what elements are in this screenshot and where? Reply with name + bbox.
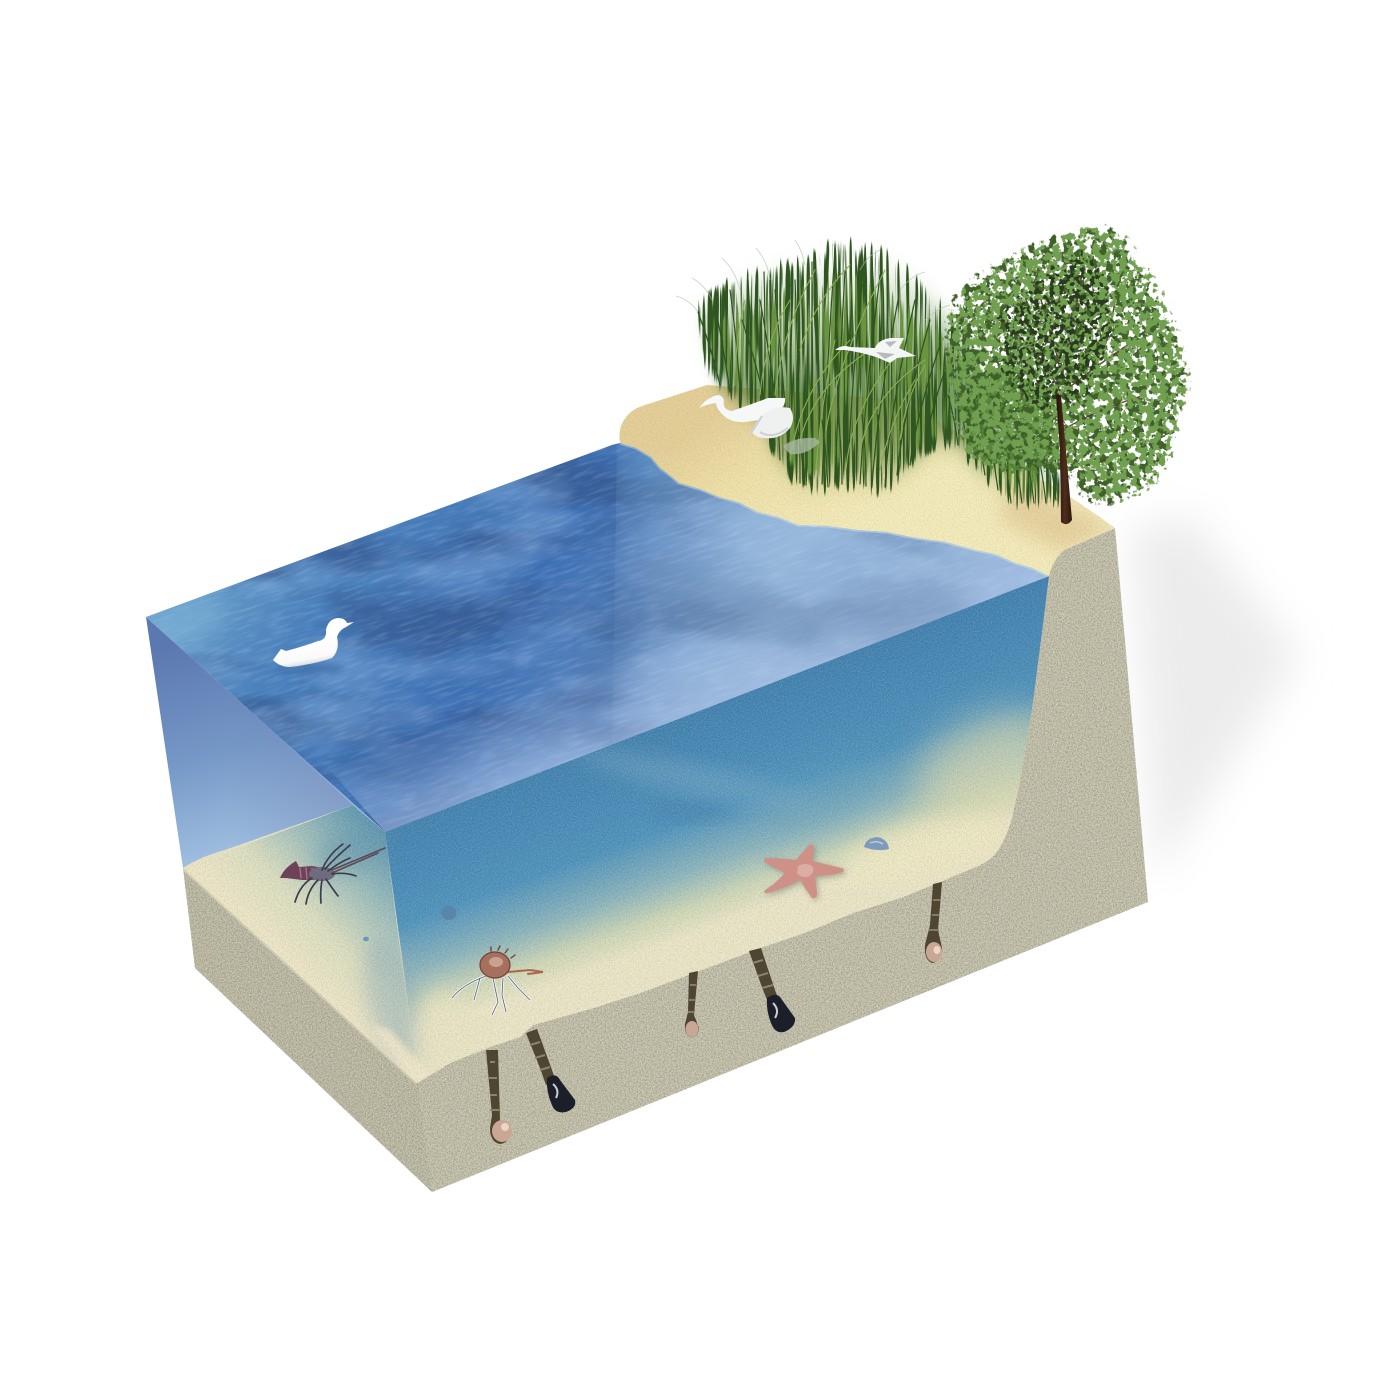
seabed: left underwater panel	[225, 805, 408, 1008]
icon: swans on the beach	[699, 395, 820, 454]
icon: burrowing mussel E	[925, 882, 942, 963]
tree	[936, 216, 1198, 524]
cast shadow of the block	[1130, 515, 1300, 880]
grass clump	[676, 228, 1070, 518]
icon: blue pebbles	[363, 837, 889, 941]
tree: branches	[985, 255, 1145, 464]
tree: foliage lower-left dense layer	[952, 350, 1060, 475]
icon: burrowing mussel D	[749, 948, 795, 1032]
beach top surface	[612, 385, 1115, 576]
water left face	[146, 617, 385, 868]
icon: flying bird	[835, 338, 916, 363]
tree: foliage shadow layer	[985, 235, 1125, 425]
icon: lobster	[280, 844, 385, 904]
seabed: sand and shadow drifts	[306, 689, 1072, 1083]
seabed and underwater front face	[170, 560, 1072, 1100]
illustration: coastal block diagram	[146, 224, 1293, 1192]
icon: burrowing mussel B	[526, 1029, 575, 1112]
tree: foliage dark layer	[938, 218, 1194, 518]
grass: wispy tips	[676, 240, 950, 320]
grass: dark streaks	[688, 228, 1070, 518]
grass: dark blades	[698, 250, 1056, 503]
icon: crab	[452, 946, 543, 1015]
sand block faces	[170, 500, 1170, 1210]
shallows near the shore	[614, 443, 1046, 736]
tree: trunk	[1056, 395, 1072, 524]
icon: burrowing mussel A	[486, 1050, 512, 1144]
icon: starfish	[764, 844, 846, 900]
icon: burrowing mussel C	[685, 971, 699, 1037]
water top surface	[146, 443, 1049, 832]
grass: light streaks	[700, 258, 1065, 506]
grass: bright blades	[735, 265, 925, 470]
seabed: front underwater panel	[385, 576, 1060, 1090]
grass: base mass	[700, 255, 1062, 502]
tree: foliage light layer	[936, 216, 1198, 520]
icon: duck on water	[273, 618, 354, 675]
